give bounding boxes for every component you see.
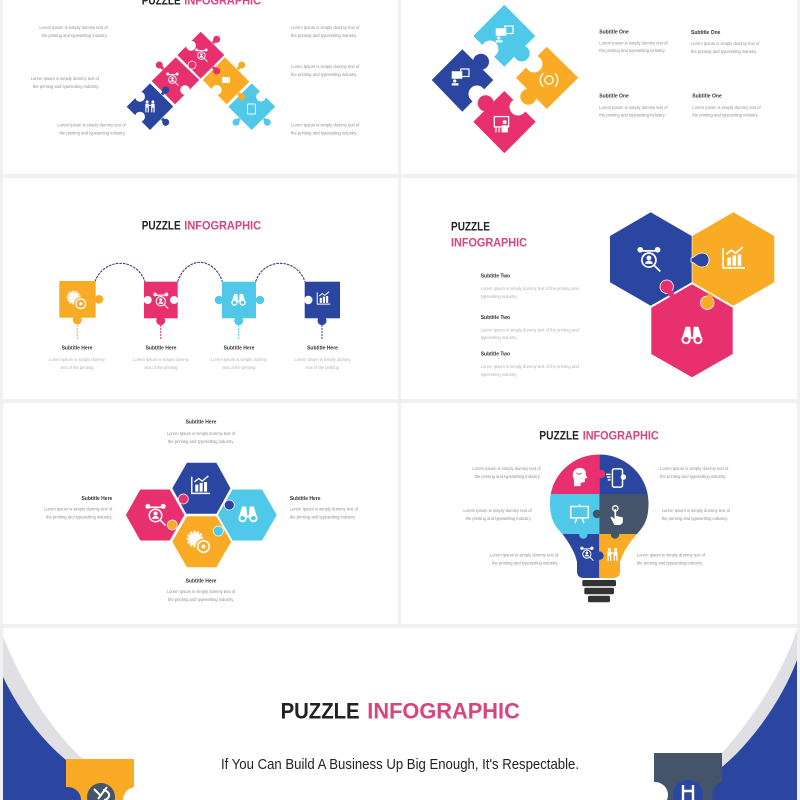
- panel: light bulb puzzle: [401, 403, 797, 624]
- text block: bottom subtitle: [167, 578, 236, 602]
- text block: subtitle one, top left: the printing and typesetting industry.: [599, 48, 666, 53]
- bulb puzzle quadrants: [550, 454, 648, 578]
- title: chevron slide: [142, 0, 261, 8]
- text block: upper right: the printing and typesetting industry.: [660, 474, 726, 479]
- text block: lower left: [57, 122, 127, 136]
- text block: middle left: Lorem Ipsum is simply dummy text of: [31, 76, 100, 81]
- text block: lower right: Lorem Ipsum is simply dummy text of: [637, 552, 706, 558]
- text block: right subtitle: [290, 496, 359, 520]
- text block: subtitle one, bottom left: Subtitle One: [599, 94, 629, 100]
- text block: lower right: the printing and typesetting industry.: [291, 130, 357, 136]
- hexagon: pink: [651, 280, 733, 377]
- puzzle piece: pink lower: [151, 57, 200, 105]
- title: timeline slide: [142, 218, 261, 232]
- puzzle piece: cyan: [228, 83, 276, 131]
- right corner swoosh: [722, 630, 797, 800]
- text block: top subtitle: the printing and typesetting industry.: [168, 439, 234, 444]
- text block: lower left: Lorem Ipsum is simply dummy text of: [490, 552, 559, 558]
- title: cover: [281, 698, 520, 723]
- text block: left subtitle: [44, 496, 113, 520]
- puzzle piece: cyan: [473, 5, 535, 67]
- text block: middle right: [291, 64, 360, 77]
- text block: left subtitle: Lorem Ipsum is simply dummy text of: [44, 506, 113, 512]
- text block: upper left: the printing and typesetting industry.: [41, 33, 108, 38]
- panel: four hexagons: [3, 403, 398, 624]
- title: bulb slide: INFOGRAPHIC: [583, 428, 659, 442]
- text block: subtitle one, bottom right: [692, 94, 761, 118]
- text block: top subtitle: Subtitle Here: [186, 420, 217, 426]
- text block: lower right: Lorem Ipsum is simply dummy text of: [291, 122, 360, 128]
- text block: subtitle two, third: Subtitle Two: [481, 352, 510, 358]
- tagline: If You Can Build A Business Up Big Enough, It's Respectable.: [221, 756, 579, 773]
- light bulb: [550, 454, 648, 602]
- icon: alarm: [580, 547, 594, 561]
- icon: head: [573, 468, 587, 486]
- hexagon: navy chart: [172, 462, 231, 514]
- text block: subtitle one, top right: [691, 30, 760, 54]
- text block: step two: [133, 345, 190, 370]
- text block: subtitle two, first: [481, 274, 579, 299]
- text block: lower right: the printing and typesetting industry.: [637, 560, 703, 566]
- text block: step two: text of the printing: [145, 365, 178, 370]
- text block: right subtitle: Lorem Ipsum is simply dummy text of: [290, 506, 359, 512]
- text block: middle left: Lorem Ipsum is simply dummy text of: [463, 508, 533, 513]
- text block: middle right: Lorem Ipsum is simply dummy text of: [291, 64, 360, 69]
- hexagon: cyan binoculars: [217, 489, 277, 541]
- text block: step one: text of the printing: [61, 365, 94, 370]
- puzzle piece: orange: [55, 759, 149, 800]
- text block: middle right: [662, 508, 731, 521]
- puzzle piece: navy: [432, 49, 493, 112]
- text block: middle right: the printing and typesetting industry.: [291, 72, 357, 77]
- title: hexagon slide: [451, 220, 527, 250]
- hexagon: orange gears: [167, 516, 232, 568]
- text block: subtitle two, first: Lorem Ipsum is simply dummy text of the printing and: [481, 286, 579, 291]
- text block: lower right: [637, 552, 706, 566]
- title: hexagon slide: INFOGRAPHIC: [451, 236, 527, 250]
- text block: step one: [49, 345, 106, 370]
- hexagon: navy: [610, 212, 692, 306]
- text block: step three: text of the printing: [223, 365, 256, 370]
- text block: subtitle one, bottom left: Lorem Ipsum is simply dummy text of: [599, 105, 668, 110]
- text block: subtitle one, bottom left: [599, 94, 668, 118]
- bulb base: [582, 580, 616, 602]
- text block: step one: Subtitle Here: [62, 345, 93, 351]
- title: timeline slide: PUZZLE: [142, 218, 181, 232]
- text block: step two: Lorem Ipsum is simply dummy: [133, 357, 190, 362]
- panel: cover slide: [3, 628, 797, 800]
- text block: bottom subtitle: Lorem Ipsum is simply dummy text of: [167, 589, 236, 594]
- text block: upper right: Lorem Ipsum is simply dummy text of: [291, 25, 360, 30]
- text block: subtitle two, second: Subtitle Two: [481, 315, 510, 321]
- text block: subtitle two, second: typesetting industry.: [481, 335, 517, 340]
- text block: step four: [295, 345, 351, 370]
- text block: upper left: Lorem Ipsum is simply dummy text of: [39, 25, 109, 30]
- puzzle piece: slate: [642, 753, 740, 800]
- left corner swoosh: [3, 636, 84, 800]
- text block: subtitle two, first: Subtitle Two: [481, 274, 510, 280]
- panel: four piece puzzle: [401, 0, 797, 174]
- text block: subtitle one, top left: Lorem Ipsum is simply dummy text of: [599, 40, 668, 46]
- title: timeline slide: INFOGRAPHIC: [184, 218, 261, 232]
- text block: middle right: Lorem Ipsum is simply dummy text of: [662, 508, 731, 513]
- text block: step four: Subtitle Here: [307, 345, 338, 351]
- puzzle piece: navy chart: [304, 282, 340, 340]
- text block: subtitle two, second: Lorem Ipsum is simply dummy text of the printing and: [481, 328, 579, 332]
- text block: right subtitle: Subtitle Here: [290, 496, 321, 502]
- text block: middle right: the printing and typesetting industry.: [662, 516, 728, 521]
- title: bulb slide: PUZZLE: [539, 428, 579, 442]
- text block: upper left: the printing and typesetting industry.: [474, 474, 541, 479]
- text block: subtitle one, top right: Subtitle One: [691, 30, 721, 36]
- text block: subtitle one, bottom right: Lorem Ipsum is simply dummy text of: [692, 105, 761, 110]
- panel: puzzle timeline: [3, 178, 398, 399]
- icon: phone: [606, 469, 626, 487]
- dashed arcs connecting pieces: [95, 262, 305, 282]
- icon: people: [608, 548, 618, 561]
- text block: subtitle one, bottom right: Subtitle One: [692, 94, 722, 100]
- text block: upper right: [660, 466, 729, 479]
- icon: pointing hand: [610, 506, 623, 525]
- text block: step three: Subtitle Here: [224, 345, 255, 351]
- text block: step three: Lorem Ipsum is simply dummy: [211, 357, 268, 362]
- puzzle piece: orange gears: [59, 281, 103, 340]
- title: bulb slide: [539, 428, 659, 442]
- puzzle piece: orange: [202, 57, 250, 105]
- puzzle piece: pink upper: [177, 31, 225, 79]
- puzzle piece: cyan binoculars: [215, 282, 264, 340]
- puzzle piece: orange: [516, 47, 578, 109]
- icon: presentation board: [571, 504, 588, 523]
- text block: middle left: the printing and typesetting industry.: [33, 84, 99, 89]
- text block: lower left: the printing and typesetting industry.: [59, 130, 126, 136]
- hexagon: pink alarm: [125, 489, 188, 541]
- text block: subtitle one, top left: [599, 29, 668, 53]
- puzzle piece: navy: [126, 83, 174, 131]
- text block: right subtitle: the printing and typesetting industry.: [290, 514, 356, 520]
- text block: left subtitle: Subtitle Here: [81, 496, 113, 502]
- text block: bottom subtitle: Subtitle Here: [186, 578, 217, 584]
- text block: subtitle two, second: [481, 315, 579, 340]
- hexagon: orange: [691, 212, 774, 306]
- text block: subtitle two, third: [481, 352, 579, 377]
- text block: top subtitle: Lorem Ipsum is simply dummy text of: [167, 431, 236, 436]
- puzzle piece: pink: [473, 91, 536, 153]
- panel: three hexagons: [401, 178, 797, 399]
- text block: subtitle two, first: typesetting industry.: [481, 294, 517, 299]
- text block: middle left: [31, 76, 100, 89]
- text block: upper right: [291, 25, 360, 38]
- text block: step three: [211, 345, 268, 370]
- text block: middle left: the printing and typesetting industry.: [465, 516, 532, 521]
- text block: subtitle one, top right: Lorem Ipsum is simply dummy text of: [691, 41, 760, 46]
- text block: subtitle two, third: typesetting industry.: [481, 372, 517, 377]
- title: cover: PUZZLE: [281, 698, 360, 723]
- puzzle knobs: [473, 45, 536, 111]
- text block: upper left: Lorem Ipsum is simply dummy text of: [472, 466, 542, 471]
- text block: lower left: [490, 552, 559, 566]
- panel: chevron puzzle: [3, 0, 398, 174]
- text block: step four: Lorem Ipsum is simply dummy: [295, 357, 351, 362]
- title: cover: INFOGRAPHIC: [367, 698, 520, 723]
- text block: upper right: Lorem Ipsum is simply dummy text of: [660, 466, 729, 471]
- text block: upper left: [472, 466, 542, 479]
- text block: step four: text of the printing: [306, 365, 340, 370]
- text block: middle left: [463, 508, 533, 521]
- text block: top subtitle: [167, 420, 236, 444]
- text block: subtitle one, bottom right: the printing and typesetting industry.: [692, 112, 759, 118]
- puzzle piece: pink alarm: [144, 282, 178, 340]
- text block: subtitle one, top right: the printing and typesetting industry.: [691, 49, 757, 54]
- text block: step two: Subtitle Here: [146, 345, 177, 351]
- text block: bottom subtitle: the printing and typesetting industry.: [168, 597, 234, 602]
- text block: subtitle two, third: Lorem Ipsum is simply dummy text of the printing and: [481, 364, 579, 369]
- text block: subtitle one, top left: Subtitle One: [599, 29, 629, 35]
- text block: left subtitle: the printing and typesetting industry.: [46, 514, 112, 520]
- text block: upper left: [39, 25, 109, 38]
- text block: subtitle one, bottom left: the printing and typesetting industry.: [599, 112, 666, 118]
- text block: upper right: the printing and typesetting industry.: [291, 33, 357, 38]
- text block: lower left: the printing and typesetting industry.: [492, 560, 558, 566]
- text block: lower right: [291, 122, 360, 136]
- text block: step one: Lorem Ipsum is simply dummy: [49, 357, 106, 362]
- text block: lower left: Lorem Ipsum is simply dummy text of: [57, 122, 127, 128]
- title: hexagon slide: PUZZLE: [451, 220, 490, 234]
